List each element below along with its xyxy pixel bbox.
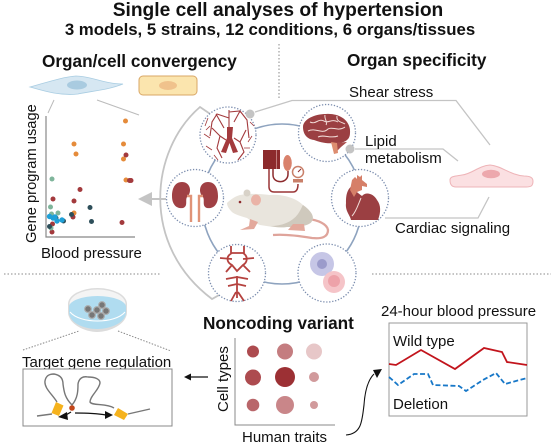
axis label: blood pressure: Blood pressure	[41, 245, 142, 262]
panel: 24-hour blood pressure: Wild type	[393, 333, 455, 350]
axis label: cell types: Cell types	[215, 346, 232, 412]
icon: petri dish	[68, 288, 127, 332]
label: 24-hour blood pressure: 24-hour blood pressure	[381, 303, 536, 320]
gray arc bracket	[160, 107, 228, 299]
circle: kidneys	[166, 170, 224, 226]
circle: brain arteries	[208, 244, 266, 302]
title: 3 models, 5 strains, 12 conditions, 6 organs/tissues	[65, 20, 475, 39]
axis label: gene program usage: Gene program usage	[24, 104, 40, 243]
heading: organ specificity: Organ specificity	[347, 50, 487, 70]
organ ring	[202, 124, 362, 284]
arrow: to target gene regulation	[184, 374, 208, 380]
heading: organ/cell convergency: Organ/cell convergency	[42, 51, 237, 71]
label: target gene regulation: Target gene regulation	[22, 354, 171, 371]
dot plot: cell types vs human traits	[235, 338, 335, 425]
icon: blood pressure cuff	[263, 150, 304, 192]
connector lines: to pink cell	[255, 100, 490, 218]
arrow: to scatter plot	[138, 192, 166, 206]
label: lipid metabolism	[365, 133, 442, 167]
node: shear stress	[246, 110, 254, 118]
circle: arteries	[200, 107, 256, 163]
title: Single cell analyses of hypertension	[113, 0, 443, 21]
label: lipid metabolism: Lipid	[365, 133, 397, 150]
title	[65, 0, 475, 39]
circle: brain	[298, 104, 356, 162]
node: lipid metabolism	[346, 144, 354, 154]
label: lipid metabolism: metabolism	[365, 150, 442, 167]
icon: pink cell	[450, 165, 533, 187]
panel: target gene regulation	[23, 369, 172, 426]
icon: mouse	[227, 190, 328, 238]
icon: blue cell	[30, 76, 123, 94]
circle: immune and blood cells	[298, 244, 356, 302]
label: shear stress: Shear stress	[349, 84, 433, 101]
label: cardiac signaling: Cardiac signaling	[395, 220, 510, 237]
scatter plot: gene program usage vs blood pressure	[46, 116, 135, 237]
icon: yellow cell	[139, 76, 197, 95]
panel: 24-hour blood pressure	[389, 323, 527, 416]
circle: heart	[332, 170, 388, 226]
heading: noncoding variant: Noncoding variant	[203, 313, 354, 333]
panel: 24-hour blood pressure: Deletion	[393, 396, 448, 413]
arrow: to 24-hour blood pressure	[346, 369, 382, 435]
